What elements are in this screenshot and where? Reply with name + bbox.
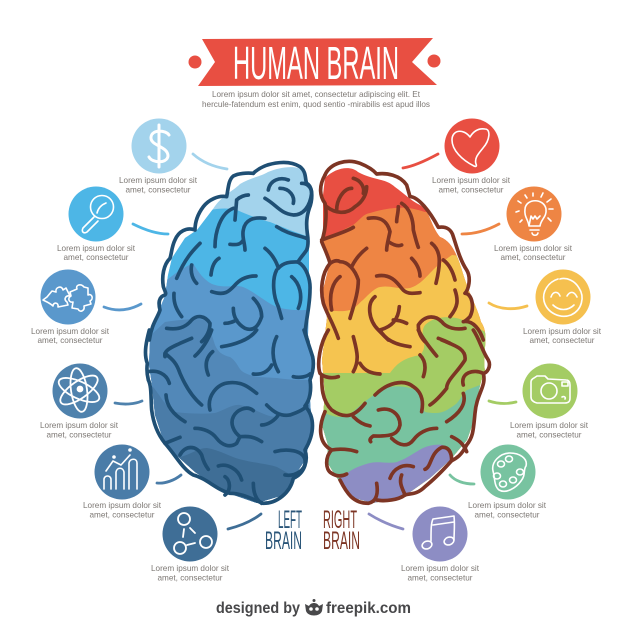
item: palette xyxy=(468,444,547,520)
infographic: LEFT xyxy=(278,506,302,534)
left brain folds upper xyxy=(149,162,312,342)
label xyxy=(83,500,162,520)
label xyxy=(57,243,136,262)
label: Lorem ipsum dolor sit xyxy=(510,420,589,430)
infographic: RIGHT xyxy=(323,506,357,534)
label: amet, consectetur xyxy=(158,572,223,582)
heading: HUMAN BRAIN xyxy=(233,37,399,89)
item: network xyxy=(151,506,230,582)
left brain label xyxy=(265,506,302,555)
intro text: hercule-fatendum est enim, quod sentio -mirabilis est apud illos xyxy=(202,99,430,109)
item: money xyxy=(119,118,198,194)
label: amet, consectetur xyxy=(46,430,112,440)
label: Lorem ipsum dolor sit xyxy=(401,563,480,573)
connector: atom xyxy=(115,401,142,404)
icon: camera xyxy=(531,376,570,403)
label: amet, consectetur xyxy=(90,510,155,520)
connector: smile xyxy=(489,303,527,309)
left ribbon dot xyxy=(188,56,202,68)
icon: heart xyxy=(452,129,489,166)
label: amet, consectetur xyxy=(38,335,103,345)
connector: puzzle xyxy=(104,304,141,310)
ribbon xyxy=(198,38,437,86)
label xyxy=(31,326,110,345)
item: camera xyxy=(510,364,589,440)
item: chart xyxy=(83,444,162,520)
connector: music xyxy=(369,514,403,529)
label: amet, consectetur xyxy=(126,184,191,194)
icon: puzzle pieces xyxy=(43,285,92,311)
item: smile xyxy=(523,270,602,345)
connector: bulb xyxy=(462,224,499,234)
connector: search xyxy=(133,224,168,234)
icon: magnifier xyxy=(82,196,114,233)
footer credit: designed by xyxy=(216,600,300,617)
right brain xyxy=(315,160,500,510)
title banner xyxy=(188,37,440,89)
right colour bands xyxy=(322,168,486,503)
label: Lorem ipsum dolor sit xyxy=(523,326,602,336)
label xyxy=(40,420,119,440)
left brain xyxy=(140,160,320,510)
connector: money xyxy=(193,154,227,169)
connector: network xyxy=(228,514,261,529)
label: amet, consectetur xyxy=(530,335,595,345)
label: Lorem ipsum dolor sit xyxy=(31,326,110,336)
label xyxy=(523,326,602,345)
icon: bar chart xyxy=(104,449,137,489)
label: Lorem ipsum dolor sit xyxy=(40,420,119,430)
connector: camera xyxy=(489,401,516,403)
label: Lorem ipsum dolor sit xyxy=(119,175,198,185)
label: amet, consectetur xyxy=(516,430,582,440)
label: Lorem ipsum dolor sit xyxy=(432,175,511,185)
label: amet, consectetur xyxy=(408,572,473,582)
item: music xyxy=(401,506,480,582)
item: search xyxy=(57,186,136,262)
label: Lorem ipsum dolor sit xyxy=(494,243,573,253)
left colour bands xyxy=(149,167,312,503)
icon: nodes xyxy=(174,513,212,554)
right brain folds upper xyxy=(321,161,483,343)
label: amet, consectetur xyxy=(64,252,129,262)
right brain label xyxy=(323,506,360,555)
icon: dollar xyxy=(149,125,169,167)
label xyxy=(468,500,547,520)
icon: music note xyxy=(421,516,455,550)
infographic: BRAIN xyxy=(265,527,302,555)
label xyxy=(494,243,573,262)
footer credit xyxy=(216,599,411,617)
connector: chart xyxy=(157,475,181,483)
label: amet, consectetur xyxy=(500,252,566,262)
icon: light bulb xyxy=(516,193,553,235)
label xyxy=(401,563,480,582)
label xyxy=(119,175,198,194)
label xyxy=(510,420,589,440)
item: heart xyxy=(432,118,511,194)
icon: freepik logo xyxy=(305,599,323,616)
right brain folds lower xyxy=(319,330,489,503)
connector: palette xyxy=(450,475,474,484)
label: amet, consectetur xyxy=(474,510,540,520)
footer credit: freepik.com xyxy=(326,600,411,617)
label: Lorem ipsum dolor sit xyxy=(83,500,162,510)
icon: palette xyxy=(493,453,526,491)
item: atom xyxy=(40,364,119,440)
icon: smiley xyxy=(544,278,582,316)
label: amet, consectetur xyxy=(438,184,504,194)
intro text: Lorem ipsum dolor sit amet, consectetur adipiscing elit. Et xyxy=(212,89,421,99)
label: Lorem ipsum dolor sit xyxy=(57,243,136,253)
label: Lorem ipsum dolor sit xyxy=(151,563,230,573)
item: puzzle xyxy=(31,270,110,345)
left brain folds lower xyxy=(145,330,313,503)
connector: heart xyxy=(403,154,438,168)
infographic: BRAIN xyxy=(323,527,360,555)
intro text xyxy=(202,89,430,109)
item: bulb xyxy=(494,186,573,262)
label xyxy=(151,563,230,582)
label: Lorem ipsum dolor sit xyxy=(468,500,547,510)
right ribbon dot xyxy=(428,54,440,68)
icon: atom xyxy=(55,367,103,413)
label xyxy=(432,175,511,194)
